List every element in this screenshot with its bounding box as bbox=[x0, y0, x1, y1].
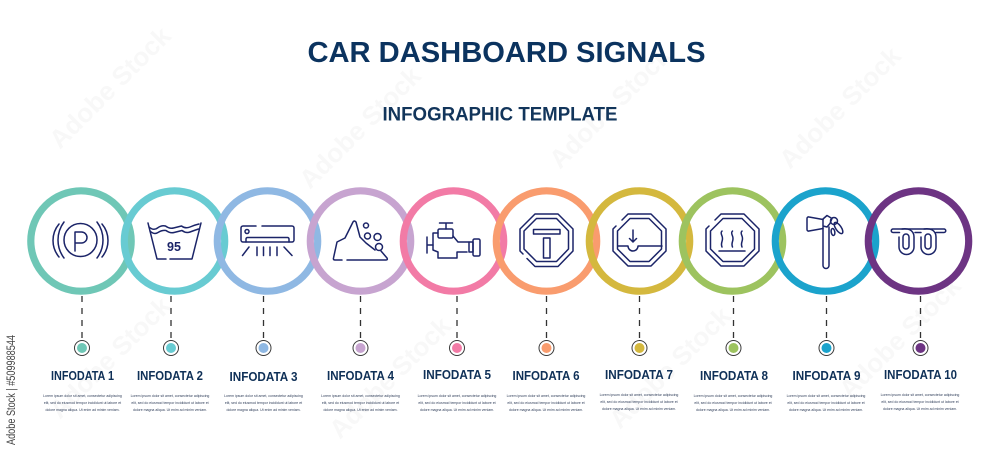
text: Adobe Stock bbox=[603, 300, 737, 434]
description 8: dolore magna aliqua. Ut enim ad minim veniam. bbox=[696, 408, 770, 412]
panel: infodata 4 bbox=[310, 191, 411, 412]
panel: infodata 3 bbox=[217, 191, 318, 412]
label 6: INFODATA 6 bbox=[512, 369, 580, 383]
description 10: elit, sed do eiusmod tempor incididunt ut labore et bbox=[881, 400, 959, 404]
icon: wash 95: 95 bbox=[167, 240, 181, 254]
label 10: INFODATA 10 bbox=[884, 368, 957, 382]
marker 2 bbox=[164, 340, 178, 356]
ring 7 bbox=[589, 191, 690, 291]
connector 7 bbox=[638, 296, 640, 340]
description 9: elit, sed do eiusmod tempor incididunt ut labore et bbox=[787, 401, 865, 405]
subtitle: INFOGRAPHIC TEMPLATE bbox=[382, 104, 618, 126]
text: Adobe Stock bbox=[543, 40, 677, 174]
description 5: dolore magna aliqua. Ut enim ad minim veniam. bbox=[420, 408, 494, 412]
icon: coil glow plug bbox=[891, 229, 946, 254]
connector 1 bbox=[81, 296, 83, 340]
icon: wash 95 bbox=[148, 223, 201, 259]
description 2 bbox=[131, 394, 209, 412]
ring 5 bbox=[403, 191, 504, 291]
description 5: Lorem ipsum dolor sit amet, consectetur adipiscing bbox=[418, 394, 496, 398]
marker 8 bbox=[726, 340, 741, 356]
panel: infodata 7 bbox=[589, 191, 690, 411]
label 5: INFODATA 5 bbox=[423, 368, 491, 382]
description 2: Lorem ipsum dolor sit amet, consectetur adipiscing bbox=[131, 394, 209, 398]
description 9: Lorem ipsum dolor sit amet, consectetur adipiscing bbox=[787, 394, 865, 398]
text: Adobe Stock bbox=[43, 290, 177, 424]
description 3 bbox=[224, 394, 303, 412]
description 3: elit, sed do eiusmod tempor incididunt ut labore et bbox=[225, 401, 302, 405]
label 7: INFODATA 7 bbox=[605, 368, 673, 382]
description 6: dolore magna aliqua. Ut enim ad minim veniam. bbox=[509, 408, 583, 412]
ring 2 bbox=[124, 191, 225, 291]
panel: infodata 5 bbox=[403, 191, 504, 412]
icon: T-junction sign bbox=[520, 214, 573, 266]
description 6: elit, sed do eiusmod tempor incididunt ut labore et bbox=[507, 401, 585, 405]
marker 5 bbox=[450, 340, 464, 356]
description 1: dolore magna aliqua. Ut enim ad minim veniam. bbox=[45, 408, 120, 412]
label 2: INFODATA 2 bbox=[137, 369, 203, 383]
connector 8 bbox=[732, 296, 734, 340]
description 6 bbox=[507, 394, 585, 412]
description 8: elit, sed do eiusmod tempor incididunt ut labore et bbox=[694, 401, 772, 405]
icon: tomahawk axe bbox=[807, 216, 844, 268]
description 4: elit, sed do eiusmod tempor incididunt ut labore et bbox=[322, 401, 399, 405]
connector 4 bbox=[360, 296, 362, 340]
panel: infodata 1 bbox=[31, 191, 131, 412]
description 10 bbox=[881, 393, 959, 411]
description 5 bbox=[418, 394, 496, 412]
ring 3 bbox=[217, 191, 318, 291]
marker 7 bbox=[632, 340, 647, 356]
marker 9 bbox=[819, 340, 834, 356]
label 8: INFODATA 8 bbox=[700, 369, 768, 383]
marker 6 bbox=[539, 340, 554, 356]
description 4: dolore magna aliqua. Ut enim ad minim veniam. bbox=[323, 408, 398, 412]
panel: infodata 9 bbox=[775, 191, 876, 412]
ring 1 bbox=[31, 191, 131, 291]
description 7: Lorem ipsum dolor sit amet, consectetur adipiscing bbox=[600, 393, 678, 397]
description 7 bbox=[600, 393, 678, 411]
description 9: dolore magna aliqua. Ut enim ad minim veniam. bbox=[789, 408, 863, 412]
text: Adobe Stock bbox=[833, 270, 967, 404]
marker 3 bbox=[256, 340, 271, 356]
text: Adobe Stock bbox=[43, 20, 177, 154]
label 9: INFODATA 9 bbox=[792, 369, 861, 383]
icon: low fluid sign bbox=[613, 214, 666, 266]
ring 9 bbox=[775, 191, 876, 291]
description 9 bbox=[787, 394, 865, 412]
description 7: dolore magna aliqua. Ut enim ad minim veniam. bbox=[602, 407, 676, 411]
description 5: elit, sed do eiusmod tempor incididunt ut labore et bbox=[418, 401, 496, 405]
title: CAR DASHBOARD SIGNALS bbox=[308, 37, 706, 69]
description 1: elit, sed do eiusmod tempor incididunt ut labore et bbox=[44, 401, 121, 405]
text: Adobe Stock bbox=[773, 40, 907, 174]
label 1: INFODATA 1 bbox=[51, 369, 114, 383]
description 3: Lorem ipsum dolor sit amet, consectetur adipiscing bbox=[224, 394, 303, 398]
connector 10 bbox=[920, 296, 922, 340]
description 1: Lorem ipsum dolor sit amet, consectetur adipiscing bbox=[43, 394, 122, 398]
ring 4 bbox=[310, 191, 411, 291]
description 4 bbox=[321, 394, 400, 412]
description 10: dolore magna aliqua. Ut enim ad minim veniam. bbox=[883, 407, 957, 411]
description 1 bbox=[43, 394, 122, 412]
icon: engine bbox=[427, 223, 480, 258]
marker 10 bbox=[913, 340, 928, 356]
description 4: Lorem ipsum dolor sit amet, consectetur adipiscing bbox=[321, 394, 400, 398]
description 2: elit, sed do eiusmod tempor incididunt ut labore et bbox=[131, 401, 209, 405]
description 6: Lorem ipsum dolor sit amet, consectetur adipiscing bbox=[507, 394, 585, 398]
marker 1 bbox=[74, 340, 90, 356]
ring 6 bbox=[496, 191, 597, 291]
ring 10 bbox=[868, 191, 969, 291]
panel: infodata 8 bbox=[682, 191, 783, 412]
description 3: dolore magna aliqua. Ut enim ad minim veniam. bbox=[226, 408, 301, 412]
connector 5 bbox=[456, 296, 458, 340]
icon: parking brake bbox=[53, 222, 108, 258]
description 2: dolore magna aliqua. Ut enim ad minim veniam. bbox=[133, 408, 207, 412]
label 3: INFODATA 3 bbox=[230, 370, 298, 384]
panel: infodata 10 bbox=[868, 191, 969, 411]
connector 9 bbox=[826, 296, 828, 340]
description 8: Lorem ipsum dolor sit amet, consectetur adipiscing bbox=[694, 394, 772, 398]
text: Adobe Stock bbox=[323, 310, 457, 444]
description 8 bbox=[694, 394, 772, 412]
description 10: Lorem ipsum dolor sit amet, consectetur adipiscing bbox=[881, 393, 959, 397]
marker 4 bbox=[353, 340, 368, 356]
panel: infodata 6 bbox=[496, 191, 597, 412]
description 7: elit, sed do eiusmod tempor incididunt ut labore et bbox=[600, 400, 678, 404]
icon: falling rocks bbox=[333, 221, 387, 260]
panel: infodata 2 bbox=[124, 191, 225, 412]
connector 3 bbox=[262, 296, 264, 340]
icon: rear defrost sign bbox=[706, 214, 759, 266]
icon: air conditioner bbox=[241, 226, 294, 256]
text: Adobe Stock bbox=[293, 60, 427, 194]
stock id side text: Adobe Stock | #509988544 bbox=[6, 335, 18, 445]
ring 8 bbox=[682, 191, 783, 291]
label 4: INFODATA 4 bbox=[327, 369, 394, 383]
connector 2 bbox=[170, 296, 172, 340]
connector 6 bbox=[546, 296, 548, 340]
